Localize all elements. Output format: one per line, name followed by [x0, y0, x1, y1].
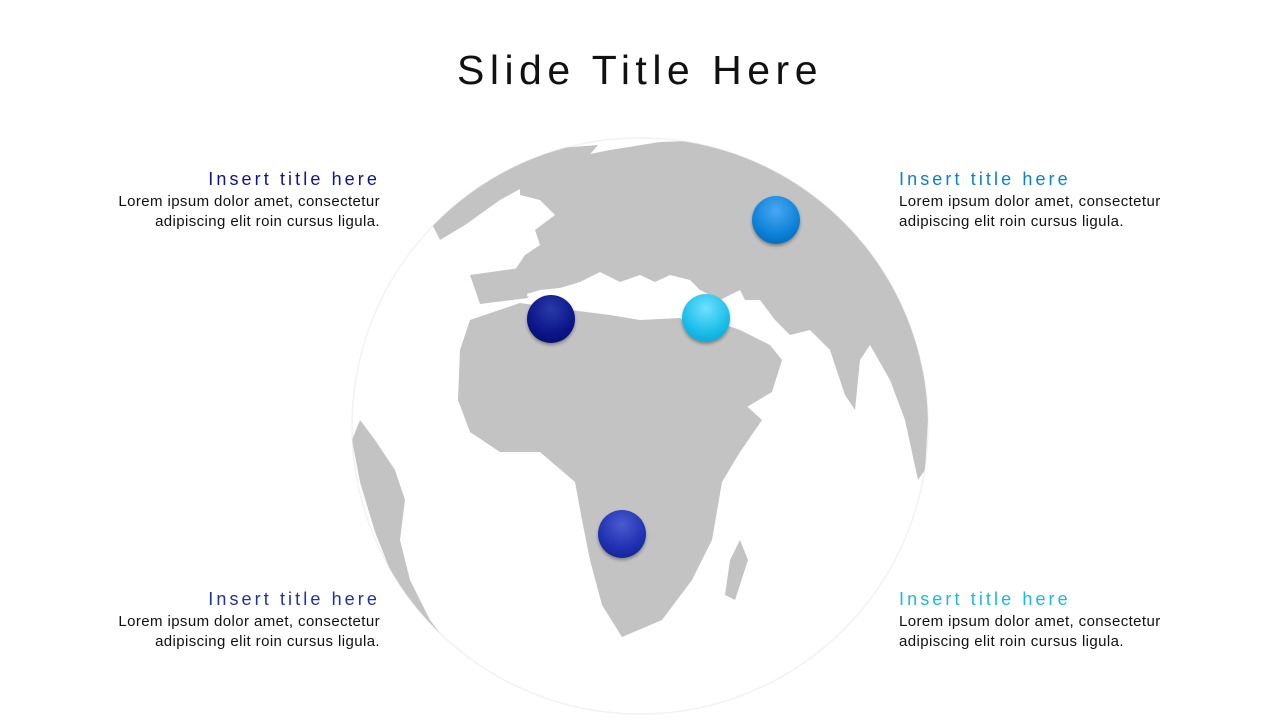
text block: top right: adipiscing elit roin cursus ligula. [899, 213, 1124, 230]
pin: russia [752, 196, 800, 244]
globe [352, 138, 928, 714]
text block: top left: adipiscing elit roin cursus ligula. [155, 213, 380, 230]
text block: bottom left: Lorem ipsum dolor amet, consectetur [118, 613, 380, 630]
text block: top right: Insert title here [899, 169, 1071, 189]
text block: bottom right [899, 589, 1161, 650]
text block: top right: Lorem ipsum dolor amet, consectetur [899, 193, 1161, 210]
pin: southern africa [598, 510, 646, 558]
text block: top left [118, 169, 380, 230]
text block: bottom right: Insert title here [899, 589, 1071, 609]
pin: north africa [527, 295, 575, 343]
text block: top left: Lorem ipsum dolor amet, consectetur [118, 193, 380, 210]
pin: middle east [682, 294, 730, 342]
text block: bottom left: Insert title here [208, 589, 380, 609]
text block: top left: Insert title here [208, 169, 380, 189]
text block: bottom left [118, 589, 380, 650]
text block: bottom right: Lorem ipsum dolor amet, consectetur [899, 613, 1161, 630]
text block: bottom left: adipiscing elit roin cursus ligula. [155, 633, 380, 650]
text block: bottom right: adipiscing elit roin cursus ligula. [899, 633, 1124, 650]
text block: top right [899, 169, 1161, 230]
title: Slide Title Here [457, 47, 823, 93]
